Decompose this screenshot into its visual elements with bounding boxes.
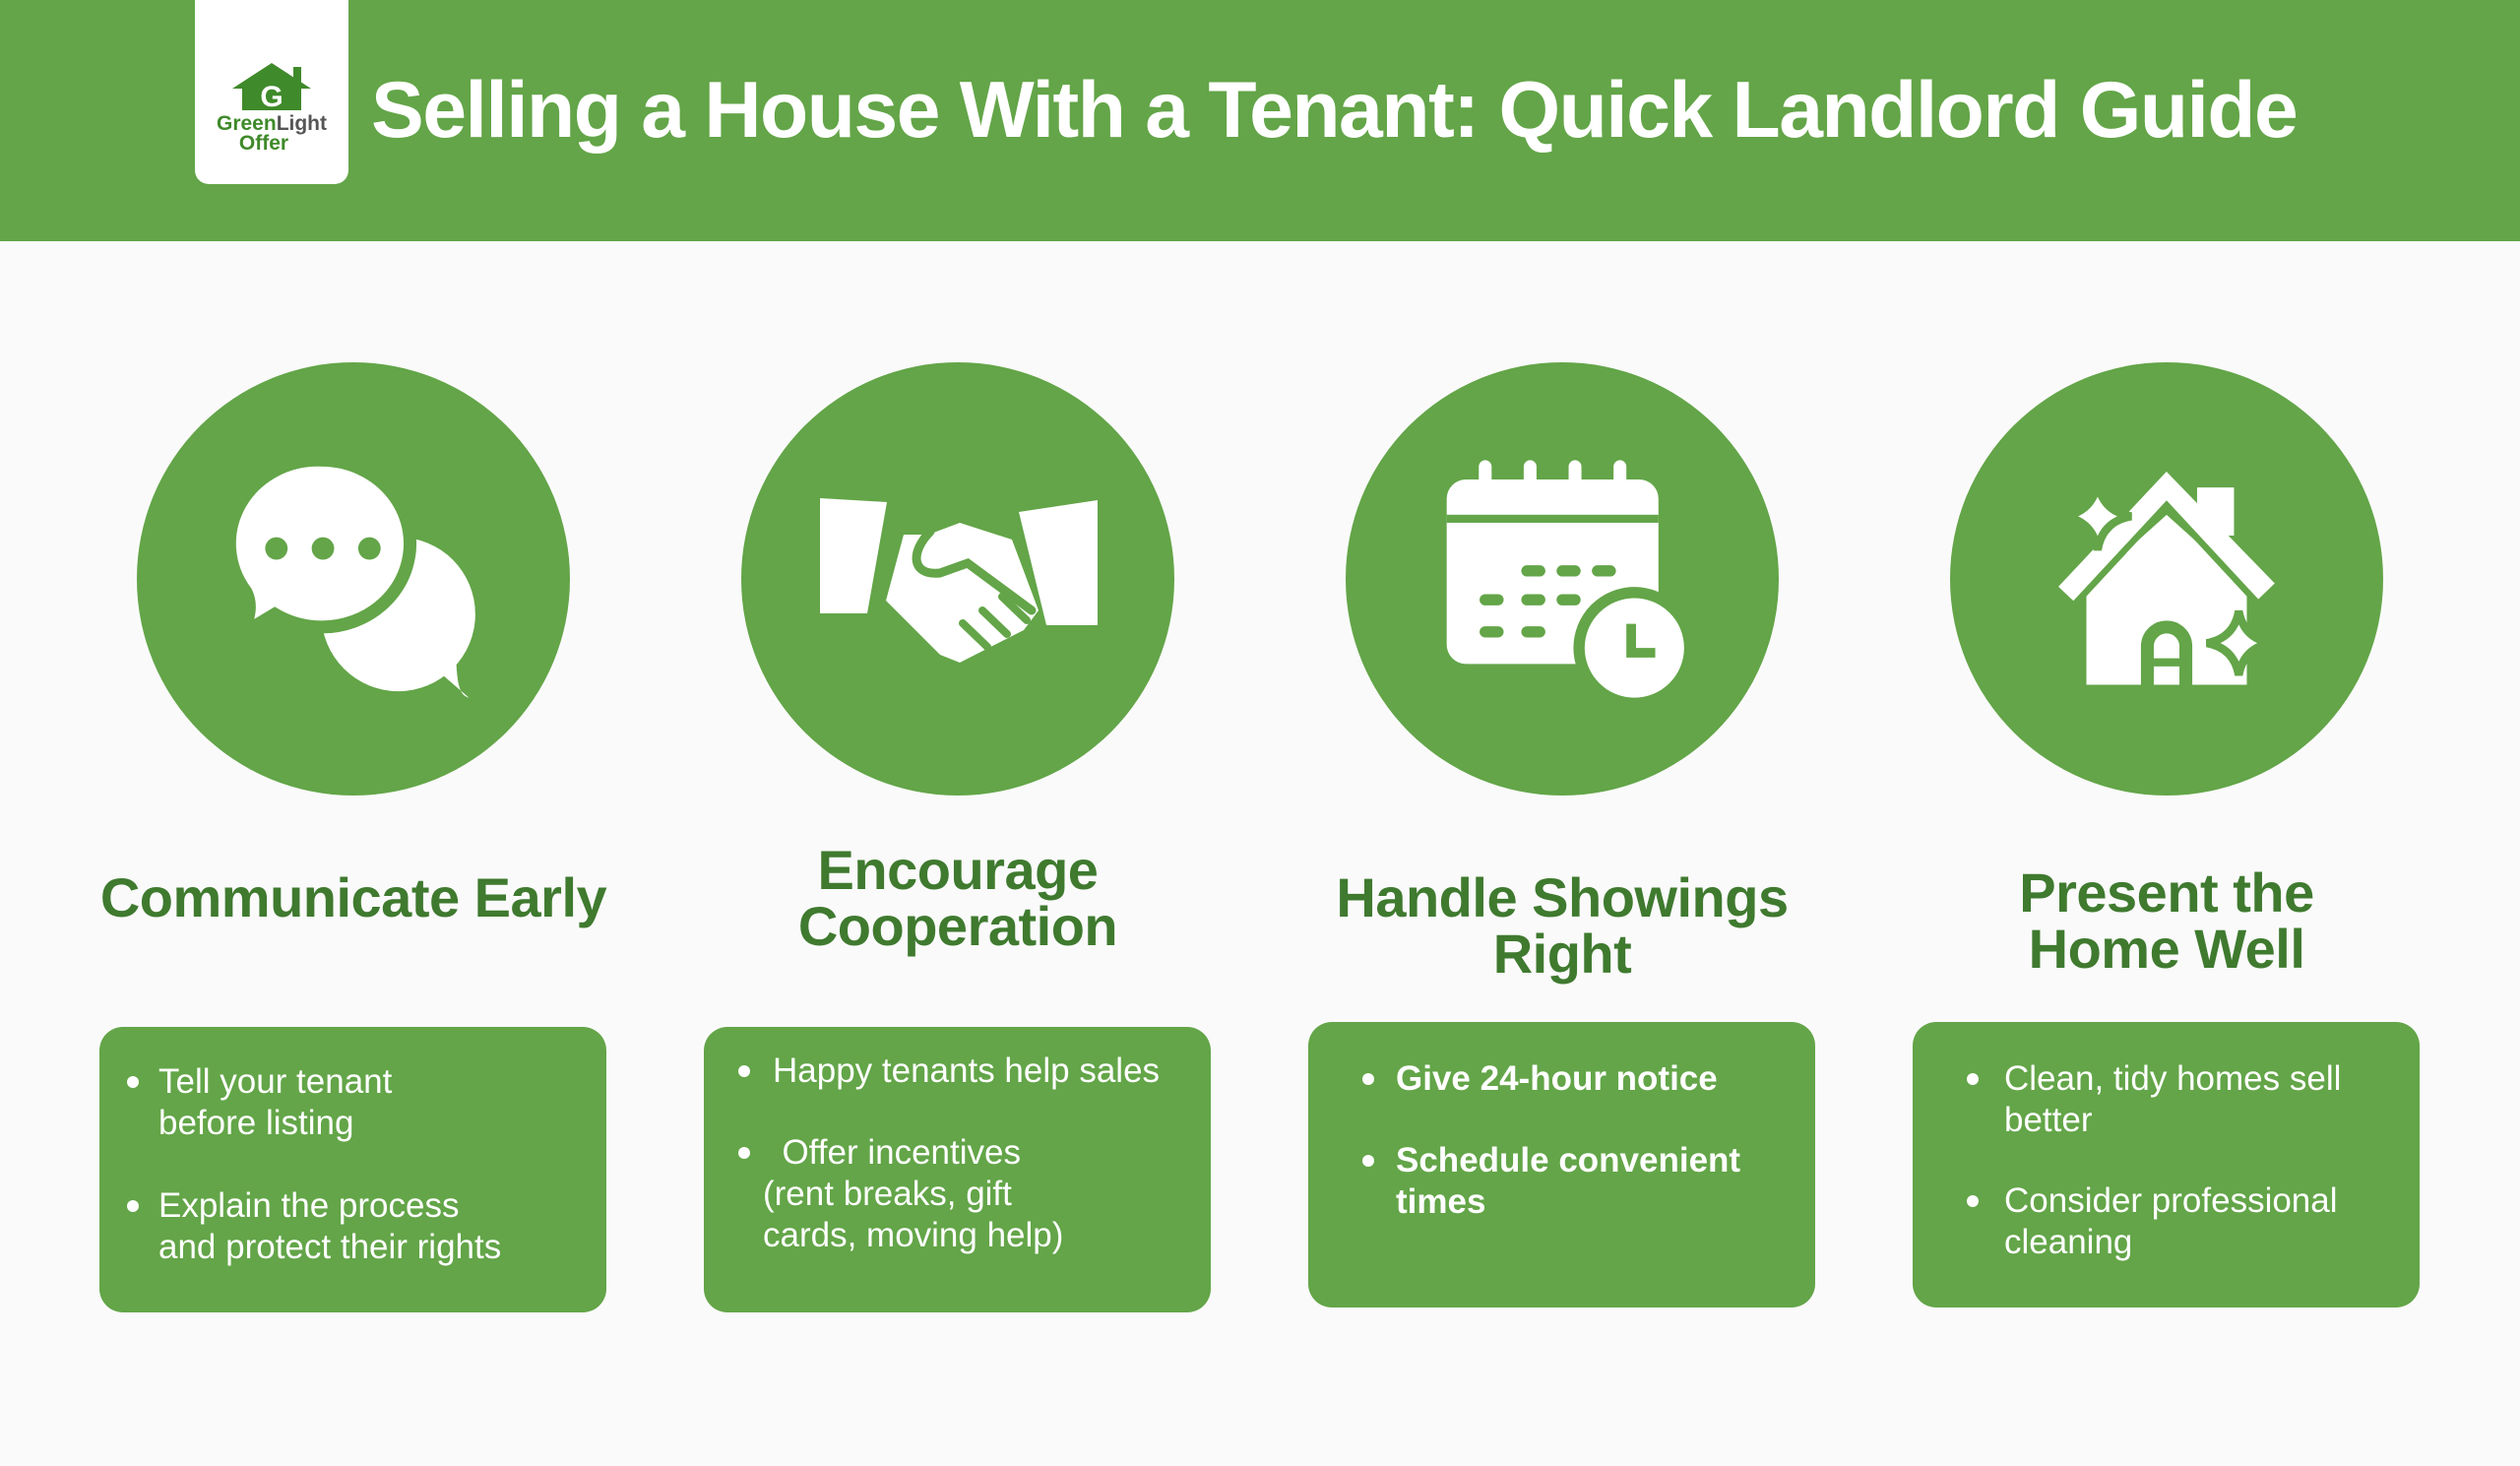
box: Present the Home bullets <box>1913 1022 2420 1307</box>
box: Communicate Early bullets: before listing <box>158 1104 353 1142</box>
icon: sparkling house <box>1950 362 2383 796</box>
box: Communicate Early bullets <box>99 1027 606 1312</box>
box: Encourage Cooperation bullets: Happy tenants help sales <box>773 1052 1160 1090</box>
box: Handle Showings bullets: Give 24-hour notice <box>1396 1059 1718 1098</box>
heading: Encourage Cooperation <box>798 839 1117 957</box>
box: Encourage Cooperation bullets: cards, moving help) <box>763 1216 1063 1254</box>
heading: Present the Home Well: Home Well <box>2029 918 2304 980</box>
heading: Handle Showings Right: Handle Showings <box>1336 866 1789 928</box>
logo: Offer <box>239 132 288 155</box>
box: Handle Showings bullets: times <box>1396 1182 1485 1221</box>
box: Present the Home bullets: Clean, tidy homes sell <box>2004 1059 2341 1098</box>
heading: Communicate Early: Communicate Early <box>100 866 606 928</box>
heading: Present the Home Well <box>2019 861 2314 980</box>
box: Present the Home bullets: Consider professional <box>2004 1181 2338 1220</box>
box: Present the Home bullets: better <box>2004 1101 2093 1139</box>
icon: handshake <box>741 362 1174 796</box>
box: Communicate Early bullets: Explain the process <box>158 1186 459 1225</box>
icon: calendar with clock <box>1346 362 1779 796</box>
heading: Encourage Cooperation: Encourage <box>818 839 1098 901</box>
logo: G <box>260 81 284 113</box>
logo: GreenLight <box>217 112 327 135</box>
box: Encourage Cooperation bullets <box>704 1027 1211 1312</box>
box: Handle Showings bullets <box>1308 1022 1815 1307</box>
logo <box>195 0 348 184</box>
box: Present the Home bullets: cleaning <box>2004 1223 2132 1261</box>
box: Handle Showings bullets: Schedule convenient <box>1396 1141 1740 1179</box>
heading: Present the Home Well: Present the <box>2019 861 2314 924</box>
box: Encourage Cooperation bullets: (rent breaks, gift <box>763 1175 1012 1213</box>
box: Communicate Early bullets: and protect their rights <box>158 1228 501 1266</box>
box: Communicate Early bullets: Tell your tenant <box>158 1062 392 1101</box>
icon: chat bubbles <box>137 362 570 796</box>
heading: Handle Showings Right <box>1336 866 1789 985</box>
heading: Handle Showings Right: Right <box>1493 923 1631 985</box>
title: Selling a House With a Tenant: Quick Landlord Guide <box>371 66 2297 155</box>
box: Encourage Cooperation bullets: Offer incentives <box>782 1133 1021 1172</box>
header bar <box>0 0 2520 241</box>
heading: Encourage Cooperation: Cooperation <box>798 895 1117 957</box>
